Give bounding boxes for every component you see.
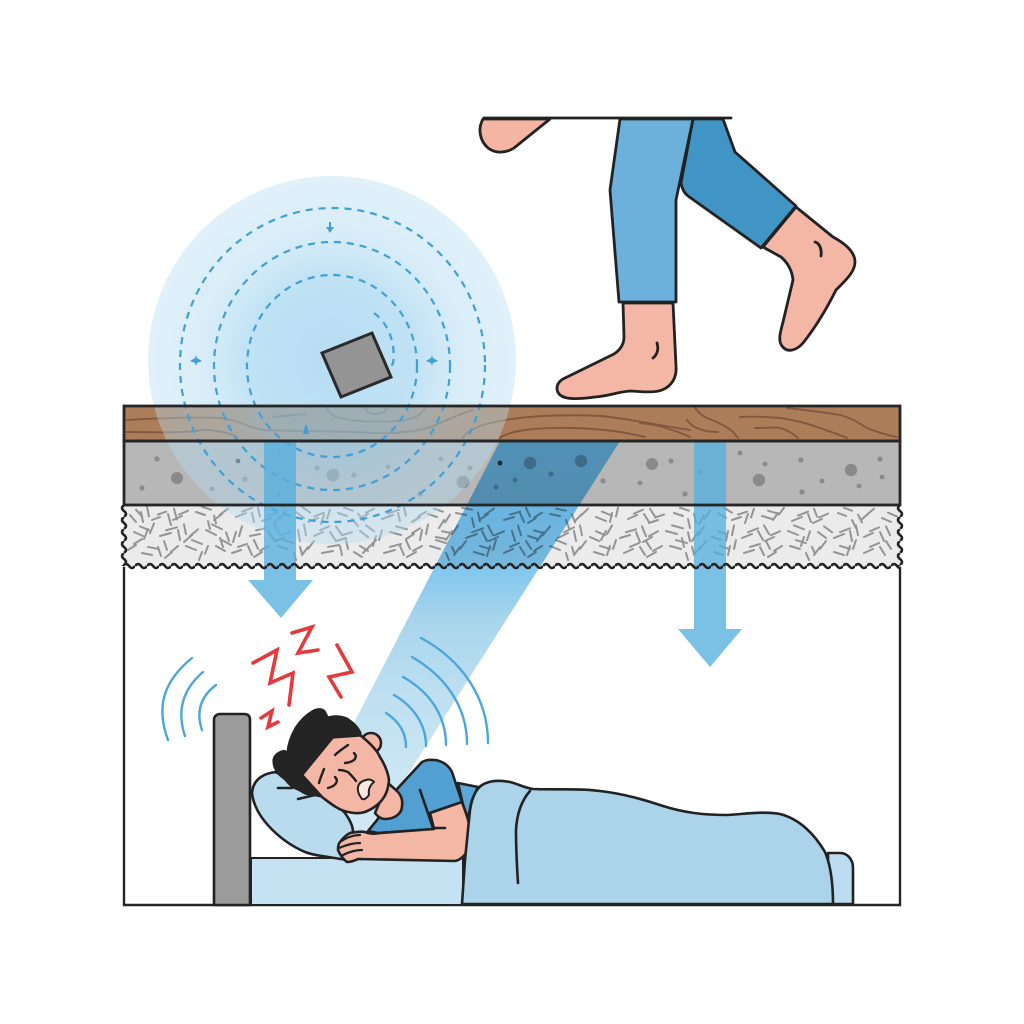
fingers [339, 835, 362, 855]
wood floor layer [124, 406, 900, 441]
pillow creases [278, 788, 315, 799]
concrete layer [124, 441, 900, 505]
walking person legs [480, 118, 855, 399]
mouth [358, 780, 374, 799]
back foot [763, 207, 855, 350]
pillow [252, 772, 353, 860]
room outline [124, 567, 900, 905]
sleeve line [420, 790, 445, 828]
ear [361, 733, 381, 753]
blue sound arcs near headboard [162, 658, 216, 740]
falling object [322, 333, 391, 397]
front foot [557, 303, 676, 399]
right arrow [678, 441, 742, 667]
arm [338, 802, 470, 862]
ankle marks [653, 242, 821, 358]
left arrow [248, 441, 313, 618]
leading toes [480, 119, 550, 152]
diagonal sound beam [345, 441, 620, 832]
waist line [484, 117, 731, 119]
back trouser leg [681, 119, 796, 248]
concrete aggregate [139, 449, 884, 498]
blanket fold [516, 791, 530, 883]
hair [273, 709, 361, 797]
blanket [462, 781, 833, 904]
infographic: impact noise travelling through a floor [120, 116, 904, 906]
mattress [251, 858, 463, 905]
floor outlines [124, 406, 900, 505]
red disturbance zigzags [253, 627, 352, 727]
sound ripple circle [148, 176, 516, 544]
footboard [828, 853, 853, 904]
shirt [368, 760, 462, 833]
bed and sleeper [214, 709, 853, 905]
headboard [214, 714, 250, 905]
closed eyes and brows [319, 745, 356, 788]
small wave markers [190, 222, 438, 434]
shirt back [458, 783, 478, 822]
wavy insulation edges [118, 505, 906, 572]
insulation layer [124, 505, 900, 566]
neck [375, 783, 402, 819]
blue sound arcs near head [386, 638, 488, 747]
face [302, 735, 389, 813]
front trouser leg [610, 119, 693, 302]
dashed sound waves [180, 208, 485, 522]
wood grain [127, 408, 897, 438]
